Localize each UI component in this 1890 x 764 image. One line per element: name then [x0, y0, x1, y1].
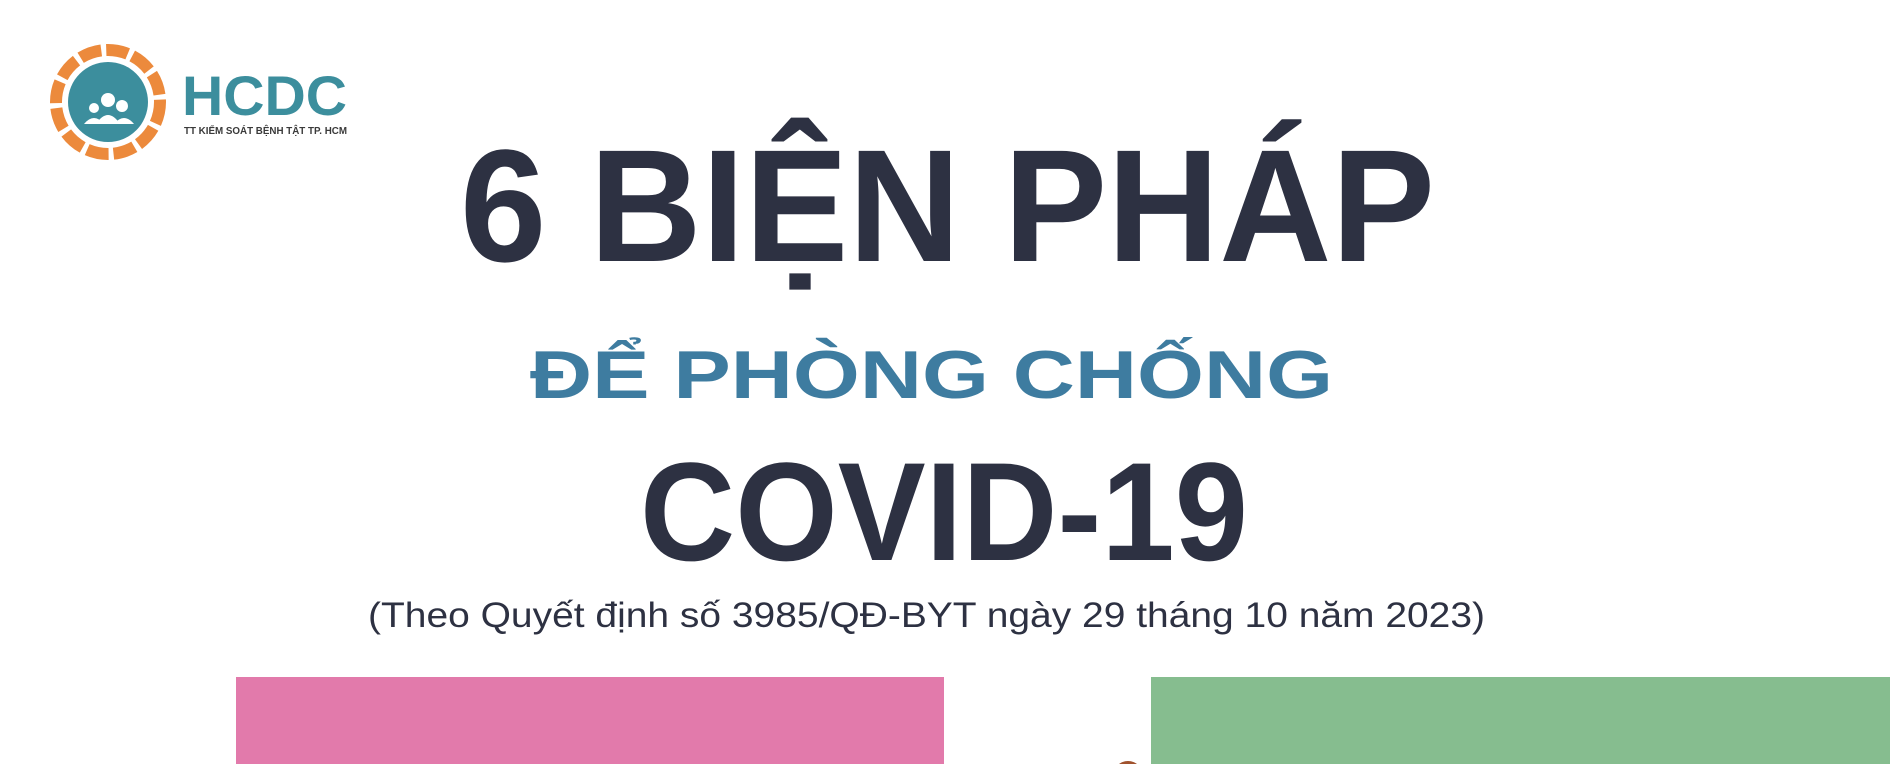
panel: pink — [236, 677, 944, 764]
logo subtitle: TT KIỂM SOÁT BỆNH TẬT TP. HCM — [184, 124, 347, 137]
subtitle: ĐỂ PHÒNG CHỐNG: ĐỂ PHÒNG CHỐNG — [530, 336, 1333, 413]
source note: (Theo Quyết định số 3985/QĐ-BYT ngày 29 tháng 10 năm 2023) — [368, 596, 1485, 635]
logo text: HCDC: HCDC — [182, 64, 347, 127]
panel: green — [1151, 677, 1890, 764]
icon: logo emblem — [56, 50, 160, 154]
title: COVID-19: COVID-19 — [640, 433, 1248, 590]
logo — [56, 50, 347, 154]
title: 6 BIỆN PHÁP: 6 BIỆN PHÁP — [460, 116, 1435, 295]
icon: brown circle — [1113, 761, 1143, 764]
